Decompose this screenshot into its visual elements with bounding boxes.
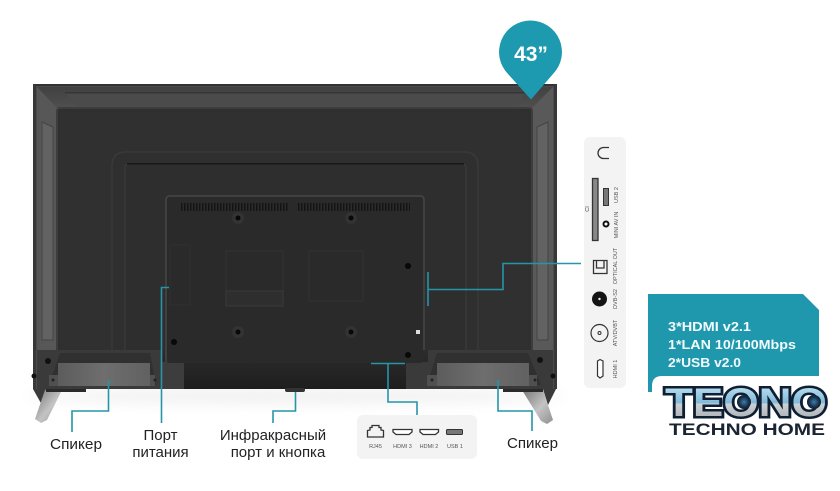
label: power port: питания: [132, 444, 189, 461]
TV outer frame: [33, 84, 557, 389]
logo: TEONO Techno Home: [652, 376, 840, 445]
leader line: power port: [162, 288, 169, 423]
text: specs list: [668, 319, 796, 370]
label: left speaker: Спикер: [50, 436, 102, 453]
label: IR port and button: порт и кнопка: [231, 444, 326, 461]
leader line: right speaker: [498, 380, 532, 431]
panel: bottom ports: [357, 415, 477, 459]
label: CI: CI: [585, 206, 591, 212]
icon: ATV socket: [591, 324, 608, 342]
back plate: [166, 196, 424, 363]
right stand foot: [503, 389, 556, 424]
icon: HDMI 1: [598, 360, 603, 378]
leader line: bottom ports: [371, 364, 417, 415]
icon: headphones: [598, 148, 609, 158]
label: power port: [132, 427, 189, 461]
right speaker: [427, 353, 556, 386]
label: optical out: OPTICAL OUT: [613, 247, 619, 284]
label: USB 2: USB 2: [614, 187, 620, 203]
icon: USB 2 slot: [604, 188, 608, 206]
label: HDMI 1: HDMI 1: [613, 360, 619, 378]
label: ATV/DVBT: ATV/DVBT: [613, 319, 619, 346]
icon: CI slot: [592, 178, 598, 240]
icon: USB 1: [446, 430, 462, 434]
label: HDMI 3: HDMI 3: [393, 444, 412, 450]
label: IR port and button: [220, 427, 326, 461]
icon: mini AV jack: [604, 222, 608, 226]
logo: TEONO Techno Home: TEONO: [665, 381, 827, 425]
raised centre outline: [112, 152, 478, 350]
base strip: [37, 350, 553, 389]
leader line: left speaker: [72, 380, 108, 432]
label: RJ45: RJ45: [369, 444, 382, 450]
leader line: IR port: [273, 392, 296, 423]
TV rear view: [32, 84, 557, 424]
label: right speaker: Спикер: [507, 435, 558, 452]
left speaker: [32, 353, 156, 386]
icon: optical out: [594, 260, 607, 274]
label: power port: Порт: [143, 427, 178, 444]
icon: RJ45: [368, 426, 384, 437]
leader line: side ports: [428, 264, 581, 306]
label: DVB-S2: DVB-S2: [613, 289, 619, 309]
size badge: 43 inch: 43”: [514, 43, 548, 66]
floor shadow: [25, 389, 565, 403]
label: mini AV in: MINI AV IN: [614, 212, 620, 238]
label: USB 1: USB 1: [447, 444, 463, 450]
left stand foot: [33, 389, 86, 423]
inner rear panel: [57, 108, 532, 353]
label: IR port and button: Инфракрасный: [220, 427, 326, 444]
panel: side ports: [584, 137, 626, 388]
text: specs list: 3*HDMI v2.1: [668, 319, 751, 334]
label: HDMI 2: HDMI 2: [420, 444, 438, 450]
text: specs list: 2*USB v2.0: [668, 355, 741, 370]
logo: TEONO Techno Home: TECHNO HOME: [669, 420, 825, 439]
text: specs list: 1*LAN 10/100Mbps: [668, 337, 796, 352]
icon: HDMI 2: [420, 430, 438, 434]
icon: DVB-S2 socket: [592, 292, 607, 306]
panel: connectivity specs: [648, 294, 819, 392]
size badge: 43 inch: [499, 20, 562, 100]
icon: HDMI 3: [393, 430, 412, 434]
IR receiver bump: [285, 388, 305, 392]
